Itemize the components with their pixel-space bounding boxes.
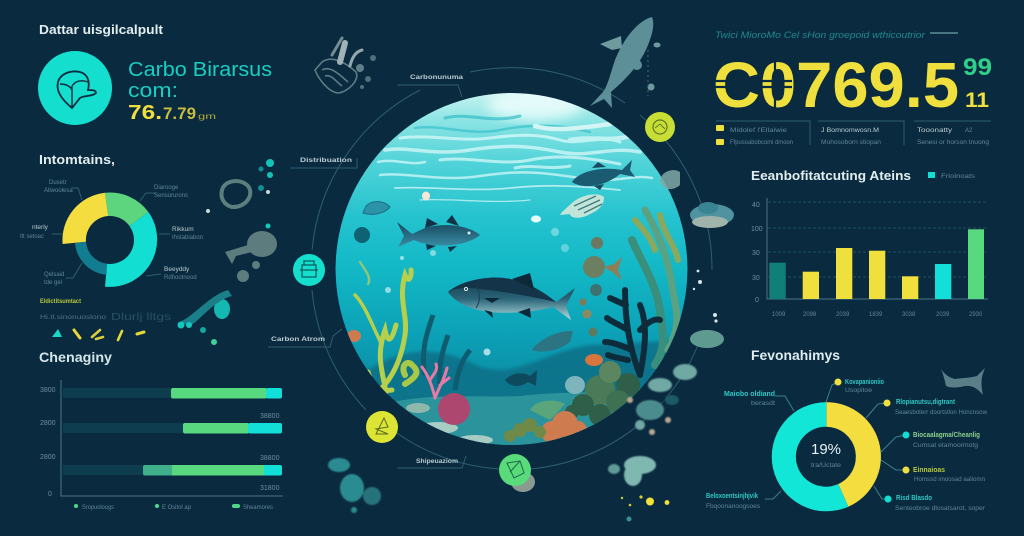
x axis labels: 3038 [902,312,916,318]
label: carbon [397,74,463,97]
x axis labels: 1839 [869,312,883,318]
callouts: Beloxoentsinjhjvik [706,493,758,500]
axis labels [40,387,280,498]
pink coral [422,364,449,398]
left decor: turtle [225,224,277,282]
x axis labels: 2039 [936,312,950,318]
callouts: Rlopianutsu,digtrant [896,399,956,406]
x axis labels [772,312,983,318]
fish: textured [532,331,573,352]
panel: right donut [706,347,988,512]
callouts: Risd Blasdo [896,495,932,502]
axis labels: 2800 [40,420,56,427]
axis labels: 38800 [260,455,280,462]
label: shipment [397,456,466,468]
stat row: Ffpusoabobcomi dmoon [730,140,793,146]
right kelp [632,210,678,365]
axes [767,198,988,299]
icon: cloud coral right [690,202,734,228]
donut callouts: nterly [32,224,49,231]
carbon subtitle: com: [128,80,178,102]
node: lime icon top [645,112,675,142]
heading: chemistry: Chenaginy [39,349,112,365]
stat row: Senesi or horson tnuong [917,140,989,146]
donut callouts: Qelsaid [44,272,64,278]
fish: brown puffer [580,237,622,336]
bubbles [385,192,569,356]
small legend title: Eldictitsumtact [40,298,82,305]
distant seabed [368,340,671,445]
icon: shark [941,368,985,395]
fish: dark lower [505,370,537,386]
left red coral [347,330,361,342]
callouts: Seaesboterr doortstlon Honcnsow [895,410,988,416]
label: carbon: Carbonunuma [410,74,463,81]
panel: carbon headline [38,22,272,125]
heading: composition: Intomtains, [39,152,115,167]
y axis labels [751,202,763,304]
icon: coral piece right [690,330,724,348]
donut chart [62,193,157,287]
node: cyan icon [293,254,325,286]
callouts: Senteobroe dlosatsarot, soper [895,506,985,512]
donut callouts: Allwoolesa [44,188,73,194]
fish: upper right [572,160,635,190]
donut center value [811,441,842,469]
callouts: Einnaioas [913,467,945,474]
carbon value [128,102,217,124]
callouts: berasdt [751,401,775,407]
donut callouts: Ihstabiabon [172,235,203,241]
callouts: Cumsat etamoormotg [913,443,978,449]
icon: hand outline [315,38,376,93]
left decor: teal creature [178,290,232,345]
fish: main tuna [448,273,575,320]
bar 1 [63,388,282,398]
y axis labels: 0 [755,297,759,304]
donut callouts: Dusetr [49,180,67,186]
donut callouts [20,180,203,286]
fish: striped [560,194,604,218]
node: yellow icon bottom left [366,411,398,443]
green fan coral [530,401,565,420]
central ocean circle [335,89,690,450]
round green coral [565,361,640,426]
red brain coral [438,393,470,425]
icon: shell right [660,170,680,189]
chart legend: Frioinoats [941,174,975,180]
stat row [716,121,991,146]
left seaweed [355,262,416,392]
chart legend: Sropuoloogs [82,505,114,511]
axis labels: 2800 [40,454,56,461]
chart legend: Sheamores [243,505,273,511]
orbit ring [312,68,712,469]
stat row: Mohosoborn stiopan [821,140,881,146]
label: carbon atom [268,329,342,347]
legend text: Hi.tl.sinonuoslono [40,315,107,321]
label: carbon atom: Carbon Atrom [271,336,325,343]
grid [768,202,988,277]
legend marks [52,329,144,340]
bars [769,229,984,299]
icon: jumping fish [590,17,660,108]
donut callouts: Diarooge [154,185,179,191]
white coral [406,376,585,445]
donut center value: 19% [811,441,841,458]
bar 2 [63,423,282,434]
black coral [605,290,660,375]
chart legend: E Ositol ap [162,505,192,511]
left decor: ring [206,159,274,213]
callouts: Usopitoe [845,388,873,394]
fish: left tuna [397,215,480,252]
orange coral [541,411,587,443]
heading: Eeanbofitatcuting Ateins [751,168,911,183]
y axis labels: 30 [752,275,760,282]
callouts: Fbqoonanoogsoes [706,504,760,510]
superscript: 99 [963,54,992,81]
yellow green coral [504,418,546,442]
heading: Fevonahimys [751,347,840,363]
chart legend [74,504,273,511]
axis labels: 31800 [260,485,280,492]
stat row: Tooonatty [917,127,953,134]
donut callouts: Rdhootnood [164,275,197,281]
axis labels: 0 [48,491,52,498]
dark coral silhouettes left [423,315,470,390]
callouts [706,378,988,512]
carbon title: Carbo Birarsus [128,59,272,81]
axis labels: 3800 [40,387,56,394]
icon: leaf badge [38,51,112,125]
y axis labels: 30 [752,250,760,257]
label: distribution [290,157,357,168]
stat row: A2 [965,128,973,134]
stat row: J Bomnomwosn.M [821,127,879,134]
dark icon in water [354,227,370,243]
fish: small left [363,202,390,214]
big number: C0769.5 [713,49,959,121]
y axis labels: 100 [751,226,763,233]
x axis labels: 1009 [772,312,786,318]
chart legend [928,172,975,180]
seabed [396,388,640,445]
donut callouts: tde gel [44,280,62,286]
callouts: Kovapanioniio [845,379,884,386]
donut chart [772,402,881,511]
donut center value: tra/Uctate [811,463,842,469]
callouts: Homssd imoosad aaliomn [914,477,985,483]
node: green icon bottom [499,454,535,492]
bottom left blob [328,458,381,513]
debris overlapping lower right of circle [626,364,697,435]
subscript: 11 [965,89,989,112]
x axis labels: 2930 [969,312,983,318]
axis labels: 38800 [260,413,280,420]
panel: horizontal bar chart [39,349,283,511]
carbon value: 76. [128,102,162,124]
heading: data visual: Dattar uisgilcalpult [39,22,164,37]
decorative bubbles right [693,270,718,323]
carbon value: 7.79 [163,104,196,123]
stat row: Midolef l'Ellaiwie [730,128,788,134]
panel: vertical bar chart [751,168,988,318]
callouts: Maiobo oldiand [724,391,775,398]
surface light [378,89,652,201]
donut callouts: Rikkum [172,226,194,233]
carbon value: gm [198,112,217,121]
stencil cuts [712,60,792,108]
label: shipment: Shipeuaziom [416,458,458,465]
x axis labels: 2098 [803,312,817,318]
bottom right blob [608,456,669,522]
donut callouts: tlt setoac [20,234,44,240]
label: distribution: Distribuation [300,157,352,164]
panel: headline number [712,30,992,146]
legend text [40,312,171,323]
panel: composition donut [20,152,203,340]
callouts: Biocaalagma/Cheanlig [913,432,980,439]
bar 3 [63,465,282,476]
x axis labels: 2039 [836,312,850,318]
legend text: Dlurlj lltgs [111,312,171,323]
donut callouts: Beeyddy [164,266,190,273]
y axis labels: 40 [752,202,760,209]
chart axes [61,380,283,496]
caption: Twici MioroMo Cel sHon groepoid wthicoutrior [715,30,926,41]
orange coral small [585,354,603,366]
donut callouts: Sensorurons [154,193,188,199]
